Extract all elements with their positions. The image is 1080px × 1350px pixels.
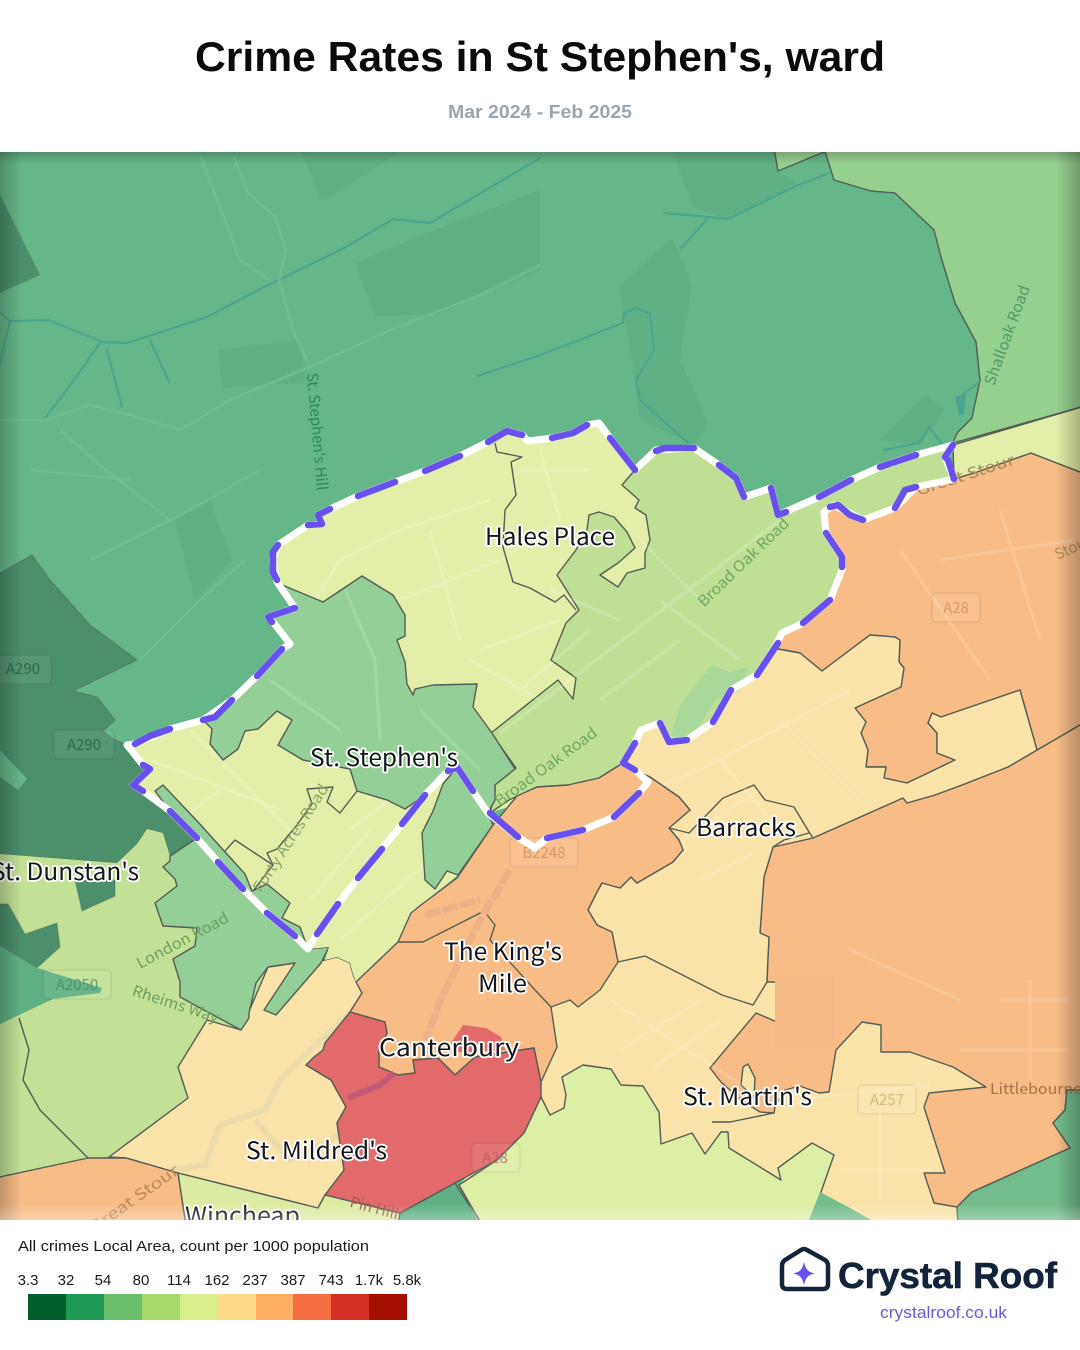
legend scale values: 387 <box>280 1272 306 1289</box>
region: bottom centre green <box>809 1192 871 1220</box>
legend colour bar <box>28 1294 407 1320</box>
shield: A2050: A2050 <box>56 974 98 995</box>
logo wordmark: Crystal Roof <box>838 1255 1058 1296</box>
legend scale values: 5.8k <box>393 1272 422 1289</box>
shield: B2248 <box>510 838 578 867</box>
road label: St. Stephen's Hill: St. Stephen's Hill <box>302 372 333 491</box>
field and road detail in central green <box>270 590 480 770</box>
wetland patch in east ward <box>671 665 748 742</box>
roads on base green <box>0 155 540 660</box>
shield: A2050 <box>43 970 111 999</box>
region: top right light green <box>824 148 1080 443</box>
region: green pocket south of ward line <box>422 767 493 889</box>
ward boundary: white outline with purple dashes <box>127 423 954 949</box>
road label: London Road: London Road <box>132 907 232 973</box>
region: green wedge <box>0 946 102 1024</box>
boundary line in King's Mile <box>398 911 551 1007</box>
region: central mid green <box>203 576 515 813</box>
legend scale values: 54 <box>95 1272 111 1289</box>
road label: Forty Acres Road: Forty Acres Road <box>248 780 333 896</box>
label: The King's Mile: Mile <box>478 964 527 999</box>
river label: Great Stour south: Great Stour <box>85 1160 183 1237</box>
region: dark patch west <box>0 904 60 968</box>
region: south green patch <box>398 1183 476 1220</box>
region: north east pale strip <box>953 406 1080 479</box>
region: strip along south west ward edge <box>155 785 308 949</box>
shield: A257 <box>858 1085 916 1114</box>
river label: Great Stour north: Great Stour <box>914 449 1017 501</box>
region: SW mid green <box>155 838 329 1030</box>
label: St. Mildred's: St. Mildred's <box>246 1131 387 1166</box>
region: ward pale interior <box>127 423 665 949</box>
region: Wincheap pale <box>178 1173 400 1225</box>
region: St Dunstan's light green <box>0 829 266 1176</box>
river corridor St Mildred's <box>160 1013 350 1172</box>
region: small pocket green <box>0 750 27 790</box>
river corridor in King's Mile <box>425 870 510 1040</box>
region: bottom left orange <box>0 1158 186 1225</box>
label: Canterbury: Canterbury <box>379 1028 520 1063</box>
shield: B2248: B2248 <box>522 842 566 863</box>
road label: Broad Oak Road north: Broad Oak Road <box>693 513 794 611</box>
title: Crime Rates in St Stephen's, ward <box>195 33 885 80</box>
icon: house with star <box>782 1249 828 1289</box>
ward outline white <box>127 423 954 949</box>
region: dark patch St Dunstan's <box>75 880 115 911</box>
Canterbury centre river strip <box>348 1073 394 1098</box>
region: The King's Mile orange <box>350 763 690 1082</box>
legend scale values: 162 <box>204 1272 230 1289</box>
region: south pale green <box>459 1065 834 1225</box>
region: top notch light green <box>774 152 824 172</box>
label: Hales Place: Hales Place <box>485 517 615 552</box>
road shields <box>0 593 980 1172</box>
roads in pale and green ward areas <box>150 450 780 940</box>
legend scale values: 32 <box>58 1272 74 1289</box>
shield: A28 south: A28 <box>482 1147 508 1168</box>
legend scale values: 1.7k <box>355 1272 384 1289</box>
legend scale values <box>18 1272 422 1289</box>
legend scale values: 80 <box>133 1272 149 1289</box>
label: St. Stephen's: St. Stephen's <box>310 738 458 773</box>
road and river labels <box>85 282 1080 1237</box>
legend scale values: 743 <box>318 1272 344 1289</box>
shield: A290 lower <box>54 730 114 759</box>
place label: Littlebourne: Littlebourne <box>990 1078 1080 1099</box>
region: St Mildred's cream <box>109 957 362 1208</box>
region: south east cream <box>461 956 984 1220</box>
legend title: All crimes Local Area, count per 1000 population <box>18 1238 369 1255</box>
map base: low crime green <box>0 152 1080 1220</box>
legend scale values: 3.3 <box>18 1272 38 1289</box>
map edge vignette <box>0 152 1080 1220</box>
label: Wincheap: Wincheap <box>185 1196 300 1231</box>
road label: Rheims Way: Rheims Way <box>130 980 222 1028</box>
road label: Shalloak Road: Shalloak Road <box>979 282 1035 388</box>
rivers and streams <box>0 158 979 450</box>
region: far west dark green <box>0 195 40 293</box>
shield: A290 upper: A290 <box>6 658 40 679</box>
boundary lines inside ward <box>225 443 576 891</box>
red lobe north of centre <box>445 1025 505 1052</box>
label: Barracks: Barracks <box>696 808 796 843</box>
shield: A28 south <box>472 1143 520 1172</box>
ward dashes purple <box>133 425 954 936</box>
region: Barracks cream <box>588 635 1037 1005</box>
shield: A257: A257 <box>870 1089 904 1110</box>
region: bottom right green <box>957 1090 1080 1225</box>
region: Canterbury red <box>306 1012 541 1213</box>
darker field in large orange <box>775 981 778 1023</box>
field patches in woodland <box>175 148 945 600</box>
label: St. Martin's: St. Martin's <box>683 1077 812 1112</box>
region: west dark green <box>0 555 197 863</box>
pale road lines on cream and orange <box>610 510 1075 1200</box>
region: south east large orange <box>710 722 1080 1207</box>
label: The King's Mile <box>444 932 562 999</box>
cream line south St Martin's <box>712 1113 774 1122</box>
legend <box>18 1238 422 1320</box>
region: north east orange <box>778 453 1080 783</box>
subtitle: date range: Mar 2024 - Feb 2025 <box>448 102 632 122</box>
shield: A28 north east <box>932 593 980 622</box>
district labels <box>0 517 812 1231</box>
logo url: crystalroof.co.uk <box>880 1304 1008 1322</box>
region: pale SE of ward <box>312 774 458 982</box>
label: The King's Mile: The King's <box>444 932 562 967</box>
road label: Broad Oak Road south: Broad Oak Road <box>490 722 601 811</box>
region: east ward green <box>490 445 954 813</box>
boundary line south of St Dunstan's <box>19 1018 88 1158</box>
cream lobe St Martin's <box>741 1064 755 1097</box>
shield: A28 north east: A28 <box>943 597 969 618</box>
legend scale values: 237 <box>242 1272 268 1289</box>
boundary lines in Barracks <box>669 785 813 847</box>
shield: A290 upper <box>0 655 51 684</box>
legend scale values: 114 <box>167 1272 191 1289</box>
logo: Crystal Roof <box>782 1249 1058 1322</box>
shield: A290 lower: A290 <box>67 734 101 755</box>
road label: Pin Hill: Pin Hill <box>348 1191 401 1224</box>
